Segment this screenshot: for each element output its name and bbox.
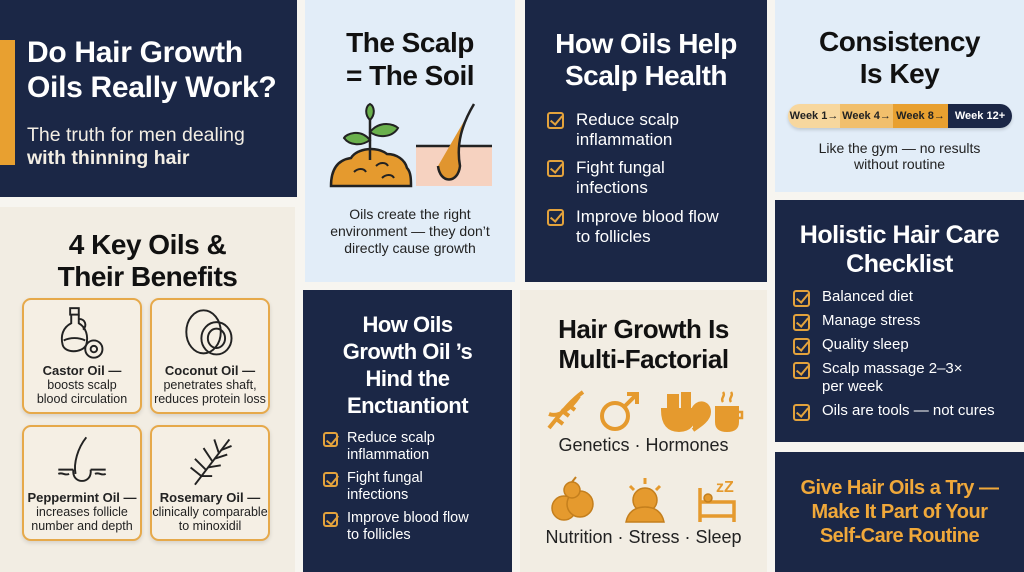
card: rosemary: Rosemary Oil — [160,490,260,505]
heading: Their Benefits [58,261,237,292]
timeline: Week 8→ [896,110,945,122]
panel: consistency [775,0,1024,192]
heading: Scalp Health [565,60,727,91]
labels row 2: Nutrition · Stress · Sleep [545,527,742,547]
subtitle [27,124,245,169]
heading [819,26,980,89]
heading: = The Soil [346,60,474,91]
heading: Checklist [846,250,953,278]
caption: Oils create the right [349,206,471,222]
heading [558,314,729,374]
card: rosemary: to minoxidil [179,519,241,533]
timeline: Week 4→ [842,110,891,122]
card: peppermint: number and depth [31,519,133,533]
card: castor: Castor Oil — [43,363,121,378]
timeline [788,104,1012,128]
card: castor: blood circulation [37,392,127,406]
cta text: Make It Part of Your [812,501,987,523]
checklist: Reduce scalp [347,430,435,446]
checklist: Fight fungal [576,158,665,177]
heading: How Oils Help [555,28,737,59]
checklist: infections [576,178,648,197]
heading [555,28,737,91]
card: rosemary: clinically comparable [152,505,268,519]
checklist: Scalp massage 2–3× [822,360,963,377]
panel: call to action [775,452,1024,572]
heading: The Scalp [346,27,474,58]
checklist: per week [822,378,883,395]
heading: Multi-Factorial [558,344,729,374]
heading: Enctıantiont [347,393,468,418]
card: coconut: penetrates shaft, [163,378,257,392]
card: peppermint: Peppermint Oil — [27,490,137,505]
caption [330,206,490,256]
icons row 2: zZ [716,479,734,496]
panel: holistic checklist [775,200,1024,442]
caption: without routine [854,156,945,172]
panel: multi-factorial [520,290,767,572]
caption [819,140,980,172]
heading: 4 Key Oils & [69,229,226,260]
heading: Hair Growth Is [558,314,729,344]
checklist: Improve blood flow [576,207,719,226]
heading: Growth Oil ’s [343,339,472,364]
checklist: inflammation [347,447,429,463]
heading: Holistic Hair Care [800,221,999,249]
card: castor [22,298,142,414]
heading: Consistency [819,26,980,57]
checklist: Fight fungal [347,470,423,486]
timeline: Week 12+ [955,110,1005,122]
caption: Like the gym — no results [819,140,980,156]
heading [58,229,237,292]
caption: environment — they don’t [330,223,490,239]
panel: key oils [0,207,295,572]
checklist: inflammation [576,130,672,149]
card: coconut: reduces protein loss [154,392,266,406]
heading: How Oils [362,312,453,337]
cta text: Self-Care Routine [820,525,979,547]
subtitle: with thinning hair [27,147,189,169]
checklist [793,288,995,421]
title [27,36,276,104]
title: Do Hair Growth [27,36,243,69]
caption: directly cause growth [344,240,476,256]
icon: plant and follicle [330,102,492,188]
icons row 1 [548,390,744,432]
accent bar [0,40,15,165]
checklist: Quality sleep [822,336,909,353]
checklist: Reduce scalp [576,110,679,129]
heading [800,221,999,278]
checklist: Manage stress [822,312,920,329]
cta text: Give Hair Oils a Try — [800,477,998,499]
panel: scalp soil [305,0,515,282]
checklist [323,430,469,543]
heading: Hind the [366,366,450,391]
card: coconut: Coconut Oil — [165,363,255,378]
title: Oils Really Work? [27,71,276,104]
timeline: Week 1→ [790,110,838,122]
checklist [547,110,719,246]
panel: how oils growth [303,290,512,572]
checklist: Improve blood flow [347,510,469,526]
card: castor: boosts scalp [47,378,117,392]
panel: how oils help [525,0,767,282]
heading [343,312,472,418]
checklist: Balanced diet [822,288,913,305]
cta text [800,477,999,547]
labels row 1: Genetics · Hormones [558,435,729,455]
icons row 2 [551,476,736,523]
card: peppermint [22,425,142,541]
heading [346,27,474,91]
checklist: infections [347,487,408,503]
checklist: Oils are tools — not cures [822,402,995,419]
card: peppermint: increases follicle [36,505,128,519]
checklist: to follicles [576,227,651,246]
subtitle: The truth for men dealing [27,124,245,146]
checklist: to follicles [347,527,411,543]
card: rosemary [150,425,270,541]
card: coconut [150,298,270,414]
heading: Is Key [860,58,939,89]
panel: title [0,0,297,197]
